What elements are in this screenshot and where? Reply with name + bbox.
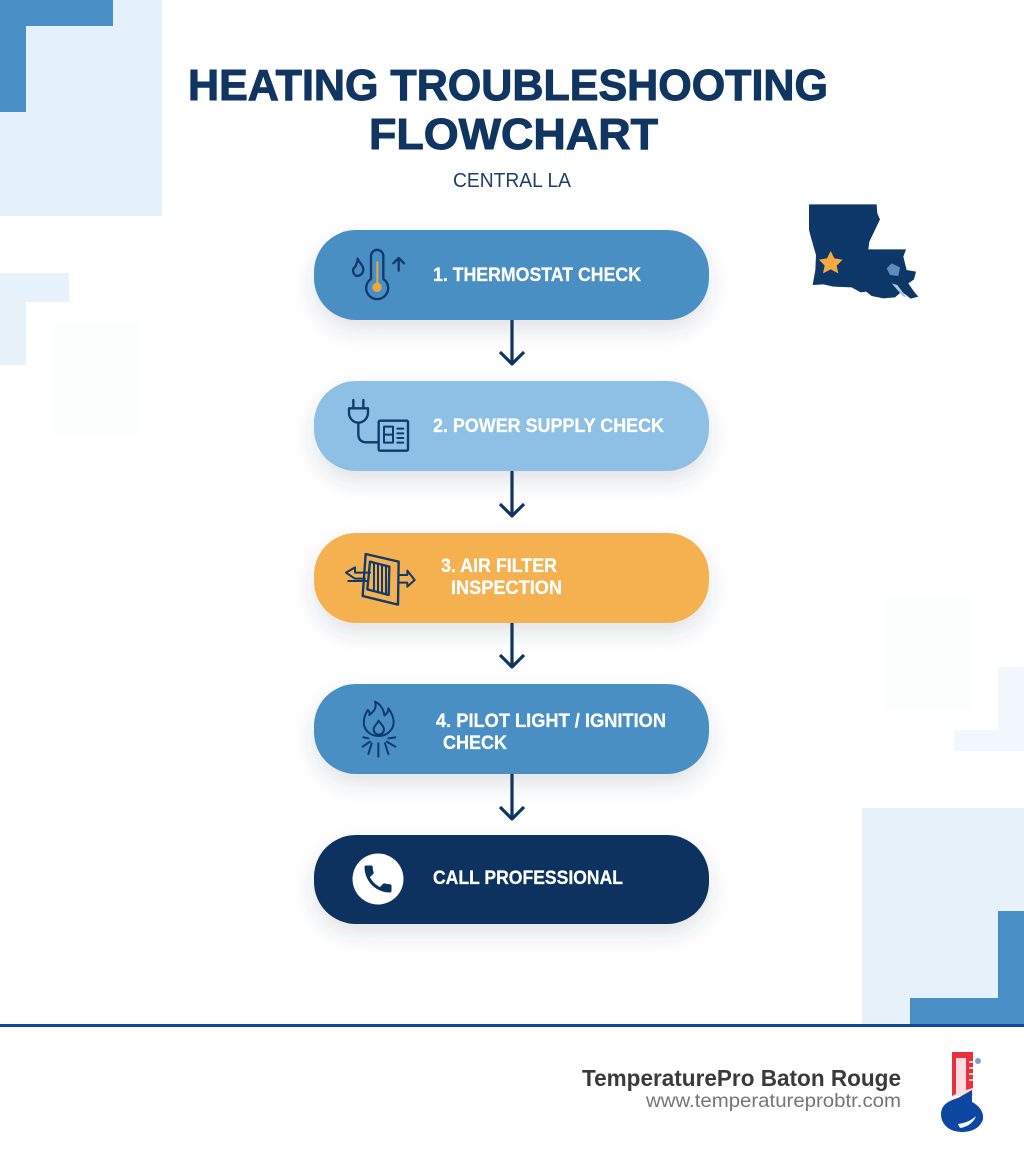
panel: call professional xyxy=(314,835,709,924)
panel: step 1 thermostat check xyxy=(314,230,709,320)
step 3 label: INSPECTION xyxy=(451,578,562,599)
decoration: top-left squares xyxy=(0,0,162,433)
title: FLOWCHART xyxy=(369,110,658,159)
subtitle: CENTRAL LA xyxy=(453,169,571,192)
arrow: step 4 to call professional xyxy=(500,774,524,819)
icon: air filter xyxy=(346,554,415,605)
arrow: step 1 to step 2 xyxy=(500,320,524,364)
icon: thermometer with flame and arrow xyxy=(353,250,404,299)
step 4 label: 4. PILOT LIGHT / IGNITION xyxy=(436,711,666,732)
footer brand name: TemperaturePro Baton Rouge xyxy=(582,1065,901,1091)
step 3 label xyxy=(441,556,562,599)
icon: Louisiana map with star xyxy=(809,204,918,299)
title xyxy=(188,61,828,159)
footer url: www.temperatureprobtr.com xyxy=(645,1091,901,1112)
title: HEATING TROUBLESHOOTING xyxy=(188,61,828,110)
step 3 label: 3. AIR FILTER xyxy=(441,556,557,577)
decoration: bottom-right squares xyxy=(862,597,1024,1024)
step 4 label xyxy=(436,711,666,754)
icon: phone xyxy=(352,854,404,904)
step 1 label: 1. THERMOSTAT CHECK xyxy=(433,265,641,286)
step 2 label: 2. POWER SUPPLY CHECK xyxy=(433,416,664,437)
arrow: step 3 to step 4 xyxy=(500,623,524,667)
arrow: step 2 to step 3 xyxy=(500,471,524,516)
call professional label: CALL PROFESSIONAL xyxy=(433,868,623,889)
footer divider xyxy=(0,1024,1024,1027)
panel: step 4 pilot light ignition check xyxy=(314,684,709,774)
panel: step 2 power supply check xyxy=(314,381,709,471)
icon: company logo thermometer xyxy=(941,1052,983,1132)
icon: plug and panel xyxy=(349,400,408,451)
panel: step 3 air filter inspection xyxy=(314,533,709,623)
icon: flame with sparks xyxy=(363,702,395,757)
step 4 label: CHECK xyxy=(443,733,507,754)
